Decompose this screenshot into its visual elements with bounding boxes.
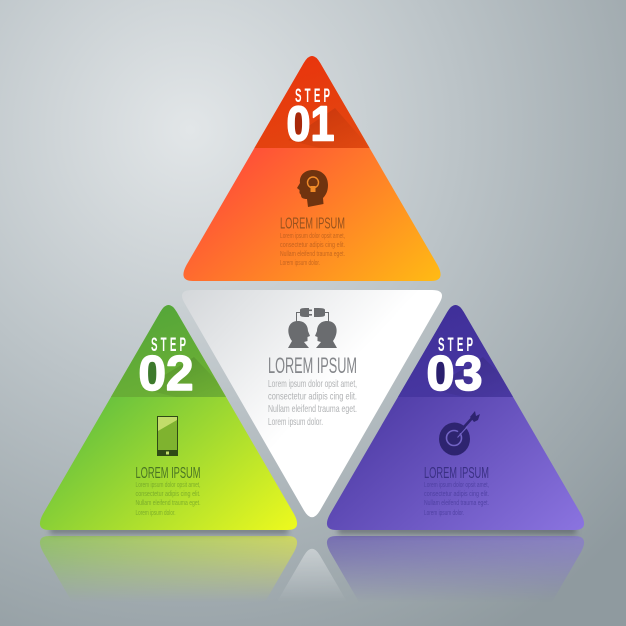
reflection of the triangles — [40, 536, 584, 596]
step 01 body text: Lorem ipsum dolor. — [280, 260, 320, 267]
panel: step 01 orange triangle — [183, 56, 441, 281]
shadows under lower triangles — [50, 527, 576, 534]
step 02 heading: LOREM IPSUM — [136, 465, 200, 482]
center body text: Lorem ipsum dolor opsit amet, — [268, 378, 357, 390]
center heading: LOREM IPSUM — [268, 353, 357, 378]
center body text: Nullam eleifend trauma eget. — [268, 403, 357, 415]
icon: target with arrow — [439, 411, 480, 456]
panel: center white triangle — [182, 290, 442, 517]
panel: step 02 green triangle — [40, 305, 298, 530]
icon: two heads connected by plug — [288, 308, 337, 348]
step 01 body text — [280, 233, 345, 267]
step 02 body text — [136, 482, 201, 517]
step 03 number: 03 — [426, 347, 482, 401]
icon: smartphone — [157, 416, 178, 456]
center body text: consectetur adipis cing elit. — [268, 390, 357, 402]
step 01 header band — [254, 56, 370, 148]
step 03 body text: Nullam eleifend trauma eget. — [424, 500, 489, 507]
step 01 body text: consectetur adipis cing elit. — [280, 242, 345, 249]
step 03 body text: Lorem ipsum dolor opsit amet, — [424, 482, 489, 489]
step 02 label: STEP — [151, 335, 186, 356]
step 03 body text: Lorem ipsum dolor. — [424, 510, 464, 517]
step 01 body text: Lorem ipsum dolor opsit amet, — [280, 233, 345, 240]
step 03 body text: consectetur adipis cing elit. — [424, 491, 489, 498]
step 03 body text — [424, 482, 489, 517]
center body text — [268, 378, 357, 428]
step 02 header band — [111, 305, 226, 397]
step 01 number: 01 — [286, 98, 334, 152]
step 02 number: 02 — [138, 347, 194, 401]
panel: step 03 purple triangle — [326, 305, 584, 530]
step 02 body text: Nullam eleifend trauma eget. — [136, 500, 201, 507]
step 01 heading: LOREM IPSUM — [280, 216, 345, 232]
step 03 label: STEP — [438, 335, 473, 356]
step 02 body text: Lorem ipsum dolor opsit amet, — [136, 482, 201, 489]
center body text: Lorem ipsum dolor. — [268, 416, 323, 428]
step 03 heading: LOREM IPSUM — [424, 465, 489, 482]
step 01 body text: Nullam eleifend trauma eget. — [280, 251, 345, 258]
step 01 label: STEP — [295, 86, 330, 107]
step 02 body text: consectetur adipis cing elit. — [136, 491, 201, 498]
icon: head with light bulb — [297, 170, 328, 207]
step 02 body text: Lorem ipsum dolor. — [136, 510, 176, 517]
step 03 header band — [398, 305, 513, 397]
